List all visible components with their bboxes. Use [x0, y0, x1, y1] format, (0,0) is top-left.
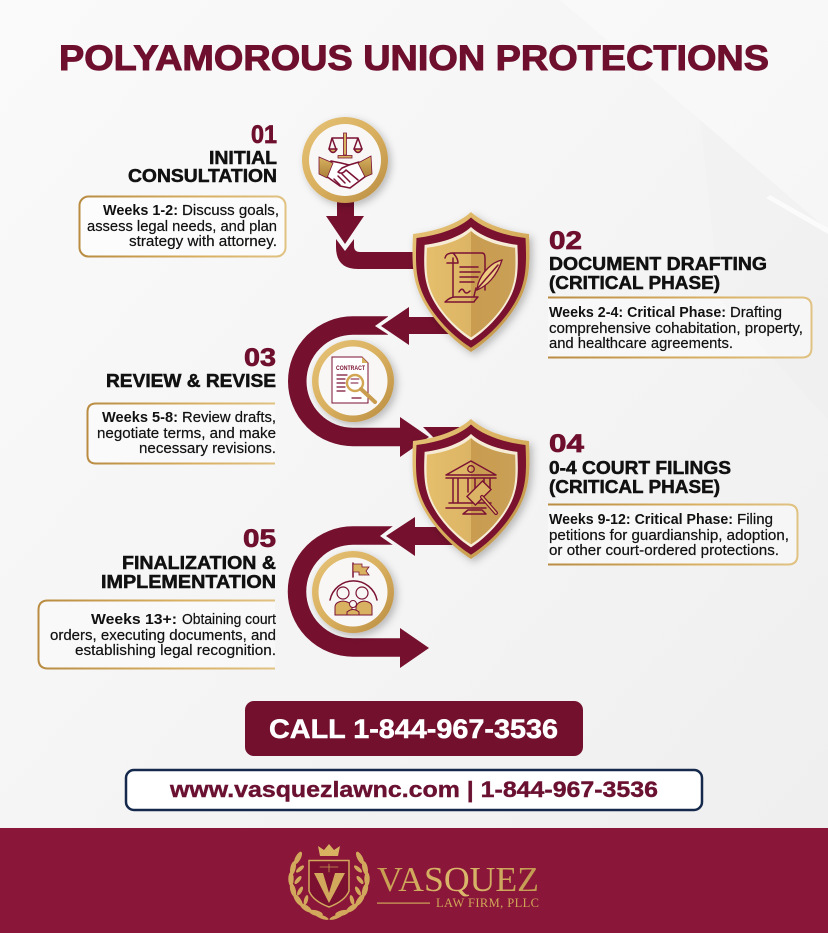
- step description box: Drafting: [730, 305, 782, 321]
- step description box: [80, 196, 286, 256]
- step heading: 0-4 COURT FILINGS: [549, 458, 731, 478]
- step description box: and healthcare agreements.: [549, 336, 733, 352]
- step description box: Weeks 9-12: Critical Phase:: [549, 512, 733, 528]
- step description box: orders, executing documents, and: [50, 628, 276, 644]
- step 5 text: [38, 525, 276, 668]
- step heading: [549, 254, 767, 293]
- step description box: petitions for guardianship, adoption,: [549, 528, 789, 544]
- step number 01: 01: [251, 121, 277, 149]
- step number 04: 04: [549, 430, 584, 458]
- logo rule: [377, 902, 430, 904]
- arrow: step 2 to step 3: [297, 307, 460, 437]
- step description box: [38, 600, 276, 668]
- step number 05: 05: [243, 525, 276, 553]
- arrow: step 4 to step 5: [297, 517, 460, 668]
- step description box: necessary revisions.: [139, 441, 276, 457]
- step description box: strategy with attorney.: [129, 234, 277, 250]
- step 3 text: [88, 344, 276, 464]
- icon: step 2 shield, scroll and quill: [412, 212, 530, 352]
- step description box: Weeks 1-2:: [103, 203, 178, 219]
- step heading: [101, 553, 276, 592]
- step number 02: 02: [549, 227, 582, 255]
- step heading: FINALIZATION &: [122, 553, 276, 573]
- step description box: Review drafts,: [182, 410, 276, 426]
- step heading: CONSULTATION: [128, 166, 277, 186]
- step heading: IMPLEMENTATION: [101, 572, 276, 592]
- step description box: Weeks 13+:: [91, 612, 177, 628]
- logo emblem: [288, 844, 370, 921]
- flow arrows: [297, 200, 465, 668]
- step description box: Filing: [737, 512, 773, 528]
- step description box: assess legal needs, and plan: [87, 219, 277, 235]
- call to action button: CALL 1-844-967-3536: [269, 714, 558, 744]
- icon: step 3 circle, contract and magnifier: [312, 340, 394, 422]
- step 4 text: [548, 430, 798, 564]
- logo subtitle: LAW FIRM, PLLC: [436, 896, 539, 910]
- step description box: Obtaining court: [182, 612, 276, 628]
- step description box: [548, 504, 798, 564]
- arrow: step 1 to step 2: [326, 200, 425, 269]
- step heading: DOCUMENT DRAFTING: [549, 254, 767, 274]
- step description box: [548, 298, 812, 358]
- step description box: comprehensive cohabitation, property,: [549, 321, 803, 337]
- step description box: Weeks 5-8:: [102, 410, 178, 426]
- step heading: [128, 148, 277, 186]
- call to action button: [245, 701, 583, 756]
- icon: step 1 circle, scales and handshake: [302, 117, 388, 203]
- icon: step 4 shield, courthouse and gavel: [412, 419, 530, 559]
- step description box: [88, 404, 276, 464]
- step heading: [549, 458, 731, 497]
- step description box: Discuss goals,: [182, 203, 279, 219]
- logo: Vasquez Law Firm: [288, 844, 539, 921]
- step description box: or other court-ordered protections.: [549, 543, 779, 559]
- step description box: negotiate terms, and make: [97, 426, 276, 442]
- icon: step 3 circle, contract and magnifier: CONTRACT: [336, 366, 365, 372]
- website and phone bar: [126, 770, 702, 810]
- footer band: [0, 828, 828, 933]
- step number 03: 03: [244, 344, 276, 372]
- logo wordmark: VASQUEZ: [377, 860, 539, 899]
- website and phone bar: www.vasquezlawnc.com | 1-844-967-3536: [169, 777, 658, 802]
- step description box: establishing legal recognition.: [75, 643, 276, 659]
- step heading: REVIEW & REVISE: [106, 371, 276, 391]
- step 1 text: [80, 121, 286, 256]
- step heading: (CRITICAL PHASE): [549, 477, 720, 497]
- step description box: Weeks 2-4: Critical Phase:: [549, 305, 726, 321]
- arrow: step 3 to step 4: [400, 417, 465, 457]
- step 2 text: [548, 227, 812, 358]
- title: POLYAMOROUS UNION PROTECTIONS: [59, 39, 769, 78]
- icon: step 5 circle, family and flag: [312, 551, 394, 633]
- step heading: INITIAL: [209, 148, 277, 168]
- step heading: (CRITICAL PHASE): [549, 273, 720, 293]
